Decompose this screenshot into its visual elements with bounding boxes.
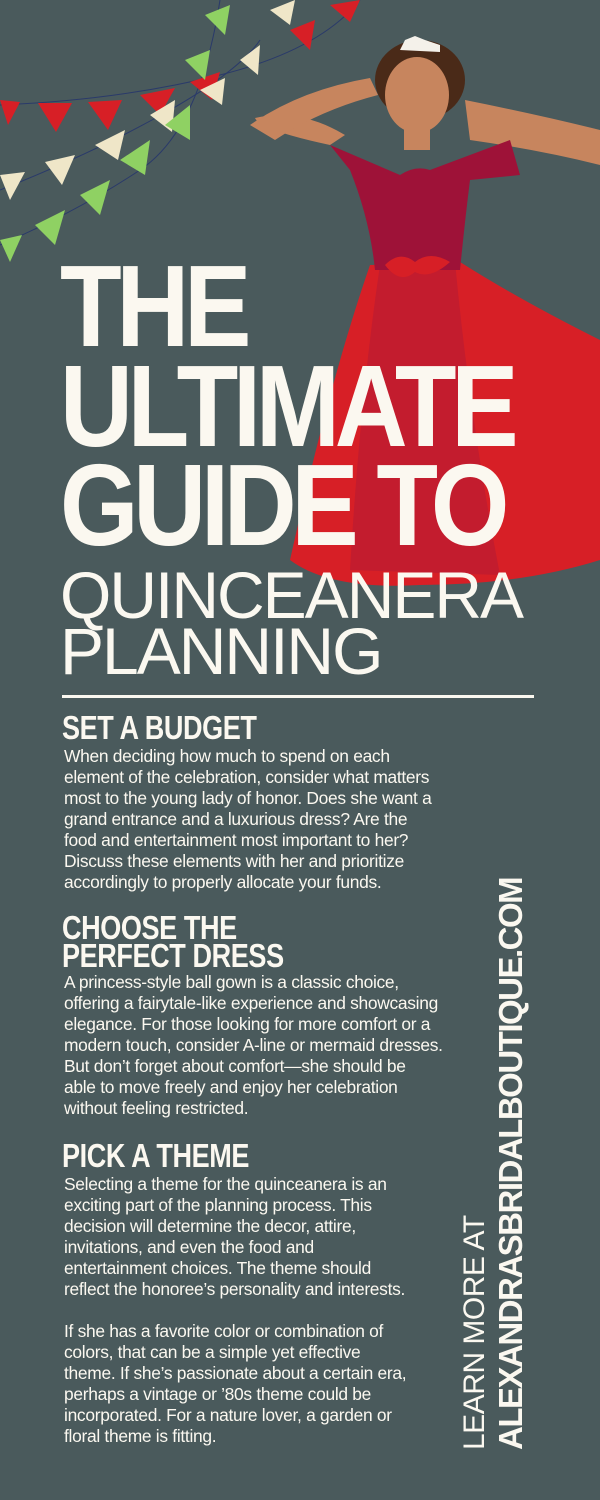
section: pick a theme: [62, 1137, 406, 1446]
section: pick a theme: If she has a favorite color or combination of: [64, 1321, 383, 1341]
section: set a budget: accordingly to properly allocate your funds.: [64, 872, 381, 892]
title: [60, 241, 524, 688]
section: choose the perfect dress: [62, 909, 443, 1118]
section: pick a theme: reflect the honoree’s personality and interests.: [64, 1279, 405, 1299]
section: pick a theme: exciting part of the planning process. This: [64, 1195, 372, 1215]
section: pick a theme: colors, that can be a simple yet effective: [64, 1342, 360, 1362]
skirt: [290, 262, 600, 586]
section: set a budget: SET A BUDGET: [62, 709, 257, 746]
title: ULTIMATE: [60, 341, 513, 471]
section: choose the perfect dress: elegance. For those looking for more comfort or a: [64, 1014, 430, 1034]
bunting: [0, 0, 360, 262]
tiara: [400, 36, 440, 52]
bow: [385, 256, 450, 277]
title: QUINCEANERA: [60, 558, 522, 632]
section: pick a theme: invitations, and even the food and: [64, 1237, 314, 1257]
vertical url callout: [458, 878, 529, 1450]
section: set a budget: most to the young lady of honor. Does she want a: [64, 788, 431, 808]
title: THE: [60, 241, 246, 371]
section: set a budget: element of the celebration, consider what matters: [64, 767, 429, 787]
section: pick a theme: theme. If she’s passionate about a certain era,: [64, 1363, 406, 1383]
illustration: girl in red dress: [250, 36, 600, 586]
section: choose the perfect dress: without feeling restricted.: [64, 1098, 248, 1118]
section: choose the perfect dress: modern touch, consider A-line or mermaid dresses.: [64, 1035, 443, 1055]
section: choose the perfect dress: able to move freely and enjoy her celebration: [64, 1077, 398, 1097]
section: set a budget: grand entrance and a luxurious dress? Are the: [64, 809, 407, 829]
hair: [375, 40, 465, 120]
title: PLANNING: [60, 614, 381, 688]
section: set a budget: food and entertainment most important to her?: [64, 830, 408, 850]
section: choose the perfect dress: offering a fairytale-like experience and showcasing: [64, 993, 438, 1013]
section: pick a theme: PICK A THEME: [62, 1137, 249, 1174]
section: pick a theme: entertainment choices. The theme should: [64, 1258, 371, 1278]
section: pick a theme: incorporated. For a nature lover, a garden or: [64, 1405, 392, 1425]
section: choose the perfect dress: PERFECT DRESS: [62, 937, 284, 974]
arms: [255, 115, 345, 145]
bodice: [330, 140, 520, 270]
title: GUIDE TO: [60, 440, 504, 570]
section: pick a theme: Selecting a theme for the quinceanera is an: [64, 1174, 387, 1194]
section: choose the perfect dress: CHOOSE THE: [62, 909, 237, 946]
section: pick a theme: floral theme is fitting.: [64, 1426, 216, 1446]
section: pick a theme: perhaps a vintage or ’80s theme could be: [64, 1384, 371, 1404]
section: pick a theme: decision will determine the decor, attire,: [64, 1216, 356, 1236]
section: set a budget: [62, 709, 432, 892]
section: set a budget: When deciding how much to spend on each: [64, 746, 390, 766]
vertical url callout: LEARN MORE AT: [458, 1215, 491, 1450]
section: choose the perfect dress: A princess-style ball gown is a classic choice,: [64, 972, 399, 992]
section: choose the perfect dress: But don’t forget about comfort—she should be: [64, 1056, 406, 1076]
face: [385, 57, 449, 133]
section: set a budget: Discuss these elements with her and prioritize: [64, 851, 404, 871]
vertical url callout: ALEXANDRASBRIDALBOUTIQUE.COM: [492, 878, 529, 1450]
